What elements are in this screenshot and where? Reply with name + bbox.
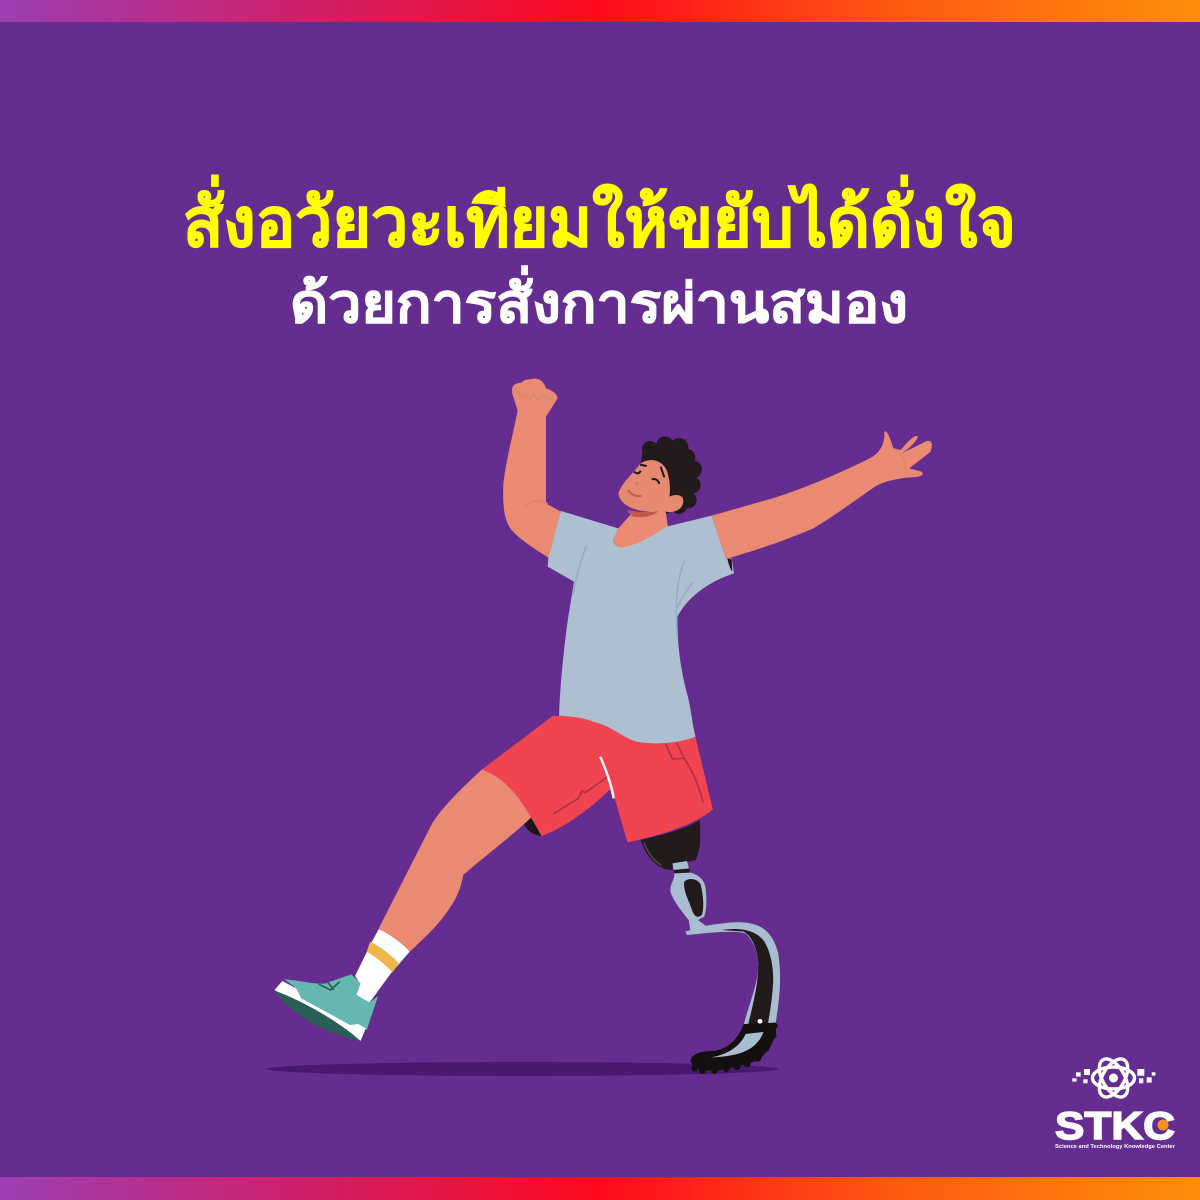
shorts	[482, 716, 713, 842]
shoe	[274, 974, 378, 1041]
prosthetic knee	[670, 861, 706, 931]
logo orange dot	[1158, 1120, 1168, 1130]
figure: person with prosthetic leg	[274, 379, 932, 1074]
logo pixel squares	[1072, 1069, 1155, 1083]
face	[618, 460, 683, 512]
upper body	[503, 379, 932, 743]
black sleeve lining	[727, 558, 732, 572]
curly hair	[641, 436, 702, 514]
bent leg	[379, 769, 532, 952]
raised arm and fist	[503, 379, 561, 558]
sock	[355, 929, 410, 1003]
outstretched arm and hand	[712, 431, 932, 559]
top gradient bar	[0, 0, 1200, 22]
bottom gradient bar	[0, 1177, 1200, 1200]
logo wordmark: STKC	[1055, 1105, 1175, 1148]
shorts liner	[524, 816, 542, 836]
logo: STKC	[1055, 1054, 1176, 1150]
ground shadow	[267, 1062, 779, 1076]
subtitle: ด้วยการสั่งการผ่านสมอง	[290, 265, 908, 334]
title: สั่งอวัยวะเทียมให้ขยับได้ดั่งใจ	[183, 174, 1016, 261]
prosthetic socket	[641, 820, 700, 870]
head	[618, 436, 702, 517]
t-shirt	[548, 511, 734, 743]
logo tagline: Science and Technology Knowledge Center	[1055, 1144, 1176, 1150]
prosthetic blade	[685, 922, 780, 1024]
prosthetic foot	[690, 1019, 778, 1074]
neck	[613, 510, 670, 557]
lower body	[274, 716, 780, 1074]
logo atom icon	[1092, 1054, 1134, 1102]
